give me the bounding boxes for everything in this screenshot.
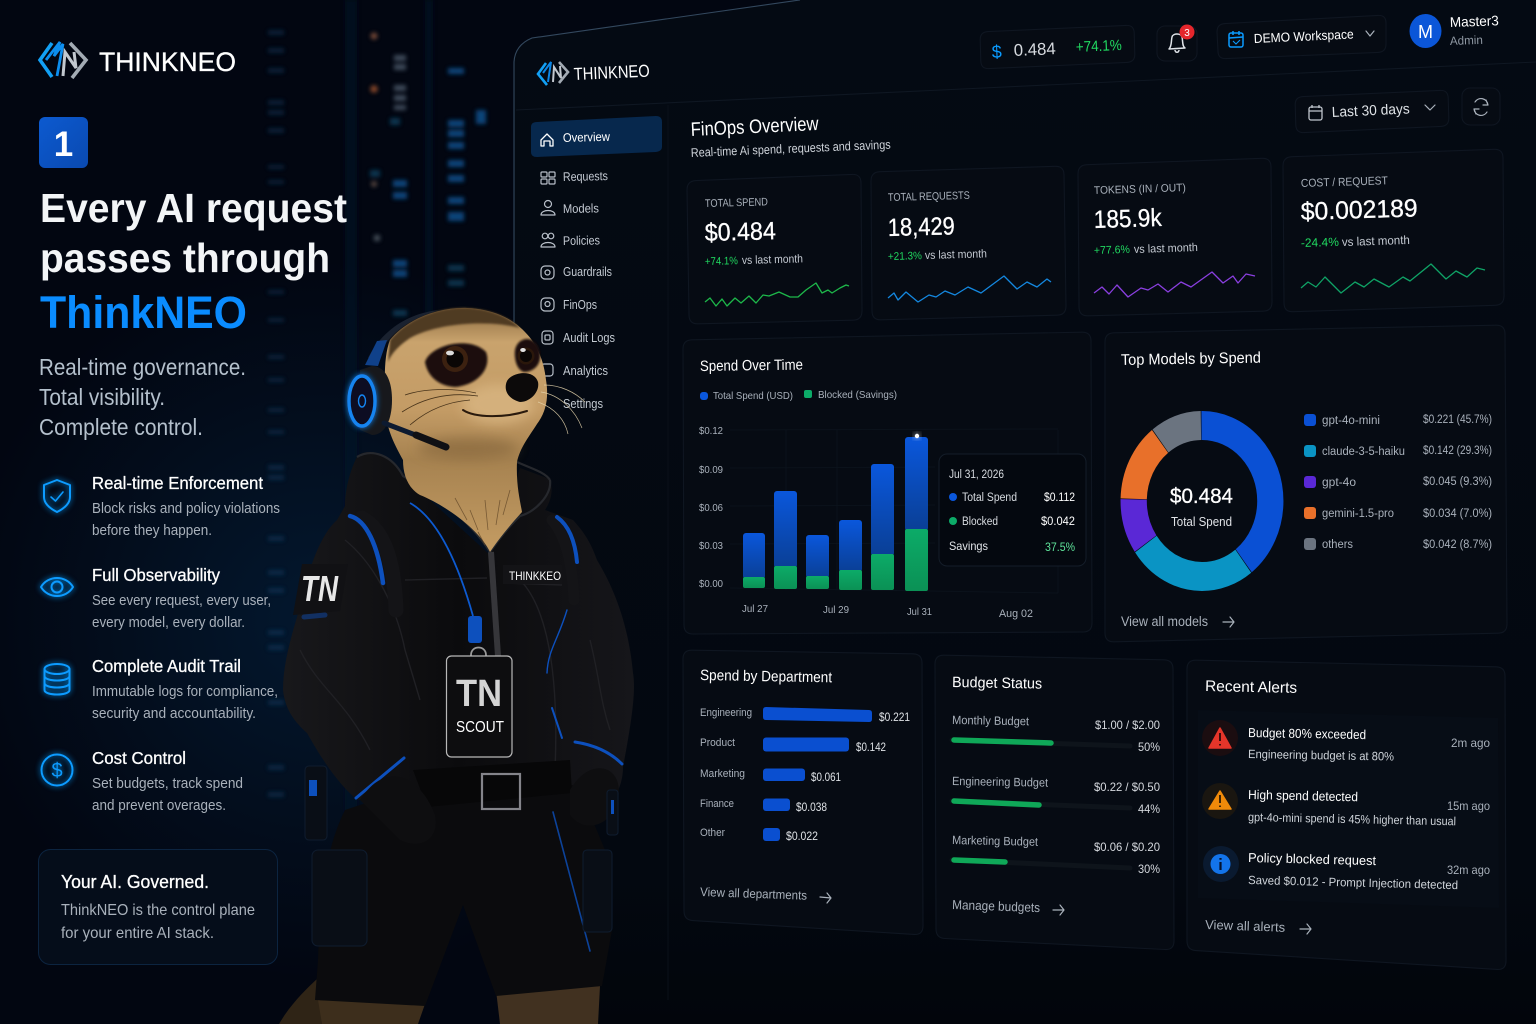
budget row: monthly: Monthly Budget: [952, 713, 1030, 728]
horizontal bar chart: Product: [700, 737, 735, 749]
subheading: Total visibility.: [39, 384, 165, 410]
ID badge: SCOUT: [456, 719, 504, 736]
chest label: [503, 565, 562, 584]
stacked bar chart: $0.00: [699, 579, 723, 590]
subheading: Real-time governance.: [39, 354, 246, 380]
donut chart: Total Spend: [1171, 515, 1232, 529]
KPI card: tokens: TOKENS (IN / OUT): [1094, 182, 1186, 197]
top bar: user: Master3: [1450, 12, 1499, 30]
shoulder patch: [293, 564, 348, 615]
refresh button: [1462, 88, 1500, 125]
legend: [700, 389, 897, 402]
budget row: marketing: [952, 833, 1160, 876]
horizontal bar chart: [700, 707, 910, 843]
callout: your AI governed: Your AI. Governed.: [61, 871, 209, 892]
nav: analytics: [541, 364, 608, 378]
feature: cost control: and prevent overages.: [92, 798, 226, 814]
tactical pouches: [305, 766, 618, 946]
icon: database: [44, 664, 70, 694]
feature: real-time enforcement: before they happen.: [92, 523, 212, 539]
nav: policies: [541, 233, 600, 248]
arrow: [1223, 617, 1234, 627]
headset: [349, 310, 446, 447]
model legend: $0.042 (8.7%): [1423, 539, 1492, 551]
muzzle highlight: [462, 384, 534, 424]
stacked bar chart: $0.06: [699, 503, 723, 514]
alert: budget exceeded: Engineering budget is at 80%: [1248, 747, 1394, 764]
dashboard logo: [538, 61, 650, 85]
nav: requests: [541, 169, 608, 184]
sidebar navigation: [531, 116, 662, 411]
KPI card: total requests: +21.3%: [888, 250, 922, 263]
headline: [40, 185, 347, 338]
lanyard: [410, 503, 473, 616]
alert: budget exceeded: 2m ago: [1451, 736, 1490, 750]
shoulder patch: TN: [301, 568, 339, 609]
nav: guardrails: [541, 265, 612, 279]
arrow: [1300, 924, 1311, 934]
page title: FinOps Overview: [690, 113, 820, 141]
legend: Total Spend (USD): [713, 390, 793, 402]
KPI card: cost per request: -24.4%: [1301, 235, 1339, 250]
alert: policy blocked: Policy blocked request: [1248, 850, 1377, 868]
horizontal bar chart: Other: [700, 827, 725, 839]
model legend: gpt-4o: [1322, 477, 1356, 489]
alert: budget exceeded: [1202, 720, 1490, 764]
panel: spend by department: Spend by Department: [700, 667, 833, 686]
model legend: $0.034 (7.0%): [1423, 508, 1492, 520]
top bar: spend pill: 0.484: [1013, 39, 1056, 60]
KPI card: total requests: vs last month: [925, 248, 987, 262]
chest label: THINKKEO: [509, 569, 561, 583]
KPI card: cost per request: COST / REQUEST: [1301, 175, 1388, 190]
horizontal bar chart: $0.022: [786, 831, 818, 843]
KPI card: total spend: $0.484: [704, 217, 776, 247]
horizontal bar chart: $0.221: [879, 712, 910, 724]
jacket: [283, 452, 634, 820]
tail and feet fur: [279, 978, 322, 1024]
alert: policy blocked: [1203, 846, 1490, 892]
nav: settings: Settings: [563, 397, 603, 411]
feature: cost control: Cost Control: [92, 748, 186, 768]
budget row: engineering: $0.22 / $0.50: [1094, 780, 1160, 794]
feature: real-time enforcement: Block risks and policy violations: [92, 501, 280, 517]
nav: models: Models: [563, 201, 599, 216]
stacked bar chart: $0.03: [699, 541, 723, 552]
subheading: Complete control.: [39, 414, 203, 440]
stacked bar chart: [699, 426, 1058, 620]
feature: cost control: [42, 748, 243, 814]
headline: Every AI request: [40, 185, 347, 231]
budget row: marketing: $0.06 / $0.20: [1094, 840, 1160, 854]
nav: models: [541, 200, 599, 216]
icon: dollar coin: [42, 754, 72, 786]
budget row: engineering: Engineering Budget: [952, 774, 1049, 790]
stacked bar chart: Jul 27: [742, 603, 768, 615]
page title: Real-time Ai spend, requests and savings: [691, 138, 891, 160]
meerkat mascot: [279, 308, 634, 1024]
nav: overview active: Overview: [563, 130, 611, 145]
horizontal bar chart: $0.142: [856, 742, 886, 754]
panel: budget status: Manage budgets: [952, 897, 1041, 915]
icon: dollar coin: $: [51, 760, 63, 782]
head and neck: [385, 308, 547, 552]
model legend: gpt-4o-mini: [1322, 415, 1380, 427]
feature: cost control: Set budgets, track spend: [92, 776, 243, 792]
budget row: engineering: 44%: [1138, 802, 1160, 816]
panel: spend over time: [683, 332, 1092, 634]
blue straps and trim: [304, 516, 622, 951]
headline: passes through: [40, 235, 330, 281]
eye patches and eyes: [425, 343, 487, 387]
budget row: marketing: Marketing Budget: [952, 833, 1039, 849]
callout: your AI governed: [38, 850, 278, 964]
sparkline: [888, 276, 1051, 302]
budget row: marketing: 30%: [1138, 862, 1160, 876]
nav: finops: FinOps: [563, 298, 597, 312]
feature: full observability: every model, every dollar.: [92, 615, 245, 631]
jacket folds: [300, 540, 610, 770]
tooltip: $0.112: [1044, 492, 1075, 504]
KPI card: cost per request: vs last month: [1342, 233, 1410, 249]
tooltip: 37.5%: [1045, 540, 1075, 554]
icon: bell: [1169, 34, 1185, 52]
tooltip: $0.042: [1041, 516, 1075, 528]
budget row: monthly: $1.00 / $2.00: [1095, 718, 1160, 732]
stacked bar chart: Jul 31: [907, 606, 932, 618]
nav: audit logs: [542, 331, 615, 345]
tooltip: Savings: [949, 539, 988, 553]
top bar: user: Admin: [1450, 33, 1483, 48]
jaw shadow: [418, 437, 518, 459]
dashboard logo: THINKNEO: [573, 61, 650, 84]
KPI card: total requests: 18,429: [887, 212, 955, 242]
alert: high spend: gpt-4o-mini spend is 45% higher than usual: [1248, 810, 1456, 828]
KPI card: total spend: +74.1%: [705, 255, 738, 268]
feature: full observability: [41, 565, 271, 631]
icon: small mark: [538, 62, 568, 85]
step badge: 1: [54, 125, 73, 164]
panel: top models by spend: [1105, 325, 1507, 642]
KPI card: total spend: vs last month: [742, 253, 803, 267]
legend: Blocked (Savings): [818, 389, 897, 401]
left column: brand logo: [40, 42, 236, 78]
feature: audit trail: security and accountability.: [92, 706, 256, 722]
alert: high spend: [1202, 783, 1490, 828]
sparkline: [1301, 264, 1485, 293]
nose: [506, 373, 538, 402]
KPI card: cost per request: $0.002189: [1300, 194, 1418, 226]
hood collar: [357, 453, 550, 552]
nav: audit logs: Audit Logs: [563, 331, 615, 345]
feature: full observability: See every request, every user,: [92, 593, 271, 609]
panel: recent alerts: Recent Alerts: [1205, 678, 1297, 697]
sparkline: [705, 283, 849, 306]
KPI card: tokens: vs last month: [1134, 242, 1198, 256]
tooltip: Jul 31, 2026: [949, 469, 1004, 481]
horizontal bar chart: Engineering: [700, 707, 752, 719]
alert: high spend: High spend detected: [1248, 787, 1358, 804]
KPI card: cost per request: [1283, 149, 1504, 312]
nav: policies: Policies: [563, 233, 600, 248]
model legend: others: [1322, 539, 1353, 551]
zipper: [491, 552, 498, 656]
icon: eye: [41, 578, 73, 596]
horizontal bar chart: $0.061: [811, 772, 841, 784]
KPI card: total spend: TOTAL SPEND: [705, 196, 768, 210]
trousers: [315, 785, 612, 1006]
tooltip: [939, 454, 1086, 566]
model legend: [1304, 414, 1492, 551]
KPI card: tokens: +77.6%: [1094, 244, 1130, 257]
KPI card: total spend: [687, 174, 862, 324]
alert: budget exceeded: Budget 80% exceeded: [1248, 725, 1366, 742]
panel: recent alerts: View all alerts: [1205, 917, 1286, 935]
budget row: engineering: [952, 774, 1160, 816]
page title: [690, 113, 891, 160]
model legend: $0.045 (9.3%): [1423, 476, 1492, 488]
ID badge: [446, 648, 512, 757]
feature: full observability: Full Observability: [92, 565, 220, 585]
date range selector: [1295, 90, 1449, 133]
KPI card: total requests: TOTAL REQUESTS: [888, 190, 970, 204]
nav: overview active: [531, 116, 662, 157]
top bar: notification bell: 3: [1184, 28, 1190, 39]
date range selector: Last 30 days: [1331, 101, 1410, 121]
icon: ThinkNEO mark: [40, 42, 86, 78]
top bar: workspace selector: DEMO Workspace: [1253, 26, 1354, 46]
stacked bar chart: Aug 02: [999, 608, 1033, 620]
ID badge: TN: [456, 673, 502, 715]
KPI card: tokens: 185.9k: [1093, 204, 1163, 234]
model legend: gemini-1.5-pro: [1322, 508, 1394, 520]
feature: real-time enforcement: [44, 473, 280, 539]
feature: audit trail: Complete Audit Trail: [92, 656, 241, 676]
top bar: spend pill: [980, 25, 1135, 69]
top bar: workspace selector: [1217, 15, 1386, 59]
belt: [413, 760, 572, 809]
top bar: notification bell: [1157, 24, 1197, 61]
alert: policy blocked: Saved $0.012 - Prompt Injection detected: [1248, 873, 1458, 892]
nav: analytics: Analytics: [563, 364, 608, 378]
panel: spend by department: View all departments: [700, 885, 807, 903]
horizontal bar chart: $0.038: [796, 802, 827, 814]
step badge: [39, 117, 88, 168]
panel: recent alerts: [1187, 660, 1506, 969]
panel: budget status: [935, 655, 1174, 950]
panel: spend by department: [683, 650, 923, 934]
gloved hands: [360, 776, 436, 844]
chest fur streaks: [455, 490, 510, 545]
top bar: spend pill: +74.1%: [1075, 37, 1122, 56]
arrow: [820, 893, 831, 903]
top bar: user: [1410, 12, 1499, 48]
forehead dark band: [388, 308, 520, 362]
stacked bar chart: $0.09: [699, 465, 723, 476]
donut chart: $0.484: [1170, 485, 1233, 508]
top bar: spend pill: $: [991, 42, 1002, 62]
panel: spend over time: Spend Over Time: [700, 357, 803, 375]
mouth: [463, 410, 527, 416]
horizontal bar chart: Marketing: [700, 768, 745, 780]
alert: policy blocked: 32m ago: [1447, 863, 1490, 877]
nav: requests: Requests: [563, 169, 608, 184]
top bar: user: M: [1418, 22, 1433, 42]
tooltip: Blocked: [962, 516, 998, 528]
icon: calendar: [1229, 31, 1243, 47]
tooltip: Total Spend: [962, 492, 1017, 504]
subheading: [39, 354, 246, 440]
brand name: THINKNEO: [99, 47, 236, 77]
model legend: $0.221 (45.7%): [1423, 414, 1492, 426]
backpack straps: [362, 518, 574, 610]
model legend: $0.142 (29.3%): [1423, 445, 1492, 457]
KPI card: total requests: [871, 166, 1066, 320]
horizontal bar chart: Finance: [700, 798, 734, 810]
stacked bar chart: $0.12: [699, 426, 723, 437]
nav: guardrails: Guardrails: [563, 265, 612, 279]
panel: budget status: Budget Status: [952, 674, 1042, 693]
KPI card: tokens: [1078, 158, 1272, 316]
nav: finops: [541, 298, 597, 312]
budget row: monthly: 50%: [1138, 740, 1160, 754]
feature: audit trail: Immutable logs for compliance,: [92, 684, 278, 700]
icon: calendar: [1309, 105, 1322, 120]
sparkline: [1094, 272, 1255, 297]
icon: shield: [44, 480, 70, 512]
panel: top models by spend: Top Models by Spend: [1121, 350, 1261, 369]
panel: top models by spend: View all models: [1121, 614, 1208, 629]
feature: real-time enforcement: Real-time Enforcement: [92, 473, 263, 493]
stacked bar chart: Jul 29: [823, 604, 849, 616]
model legend: claude-3-5-haiku: [1322, 446, 1405, 458]
dashboard panel: [514, 0, 1536, 1024]
whiskers: [402, 389, 478, 425]
headline: ThinkNEO: [40, 287, 247, 338]
alert: high spend: 15m ago: [1447, 799, 1490, 813]
callout: your AI governed: for your entire AI stack.: [61, 925, 214, 942]
background: server racks: [268, 0, 486, 1024]
arrow: [1053, 905, 1064, 915]
feature: audit trail: [44, 656, 278, 722]
donut chart: [1134, 426, 1270, 576]
budget row: monthly: [952, 713, 1160, 754]
callout: your AI governed: ThinkNEO is the control plane: [61, 902, 255, 919]
